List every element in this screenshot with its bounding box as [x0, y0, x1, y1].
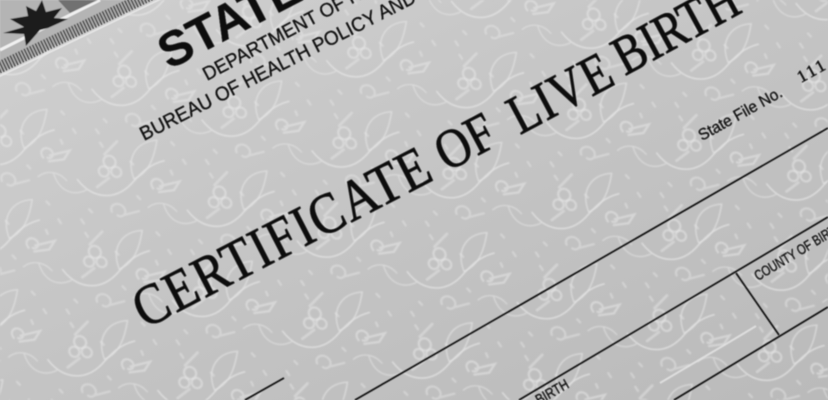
icon: maple leaf	[3, 0, 68, 46]
title: certificate of live birth	[122, 0, 750, 340]
paper crease	[660, 326, 756, 383]
label: state file number: State File No.	[696, 84, 786, 145]
title: certificate of live birth: CERTIFICATE	[122, 133, 443, 340]
title: certificate of live birth: OF	[424, 101, 506, 183]
ornate border corner	[0, 0, 165, 77]
title: certificate of live birth: LIVE	[497, 40, 624, 146]
form rule lines	[245, 128, 828, 400]
